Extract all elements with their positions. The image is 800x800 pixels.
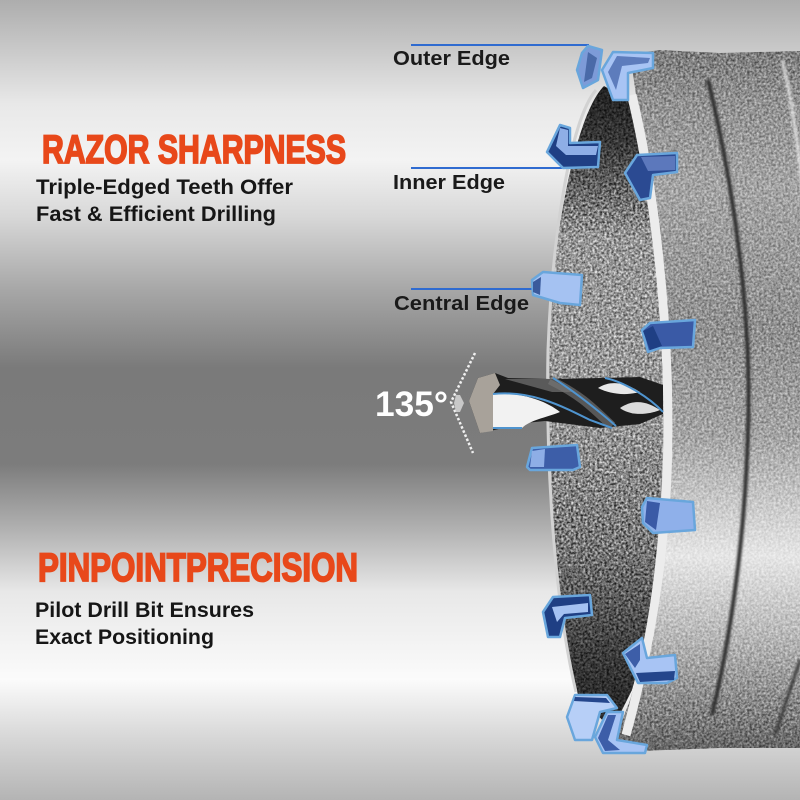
pilot drill bit [469, 373, 663, 433]
text: precision description: Pilot Drill Bit Ensures [35, 599, 254, 622]
angle marker [451, 353, 475, 453]
label: inner edge: Inner Edge [393, 172, 505, 194]
text: precision description: Exact Positioning [35, 626, 214, 649]
tooth 8 [642, 498, 695, 533]
tooth 4 [625, 153, 677, 200]
label: outer edge: Outer Edge [393, 48, 510, 70]
blue line: inner edge [411, 167, 567, 169]
text: razor description: Fast & Efficient Drilling [36, 203, 276, 226]
text: razor description [36, 176, 293, 226]
cylinder wall [618, 50, 800, 751]
heading: pinpoint precision: PINPOINTPRECISION [38, 546, 358, 590]
blue line: central edge [411, 288, 535, 290]
tooth 1 [577, 46, 602, 88]
tooth 3 [547, 125, 600, 168]
teeth [527, 46, 695, 753]
tooth 11 [567, 695, 617, 740]
tooth 12 [595, 712, 647, 753]
tooth 9 [543, 595, 592, 637]
tooth 10 [623, 638, 677, 683]
bright rim [626, 95, 668, 735]
label: central edge: Central Edge [394, 293, 529, 315]
inner face [549, 86, 663, 720]
tooth 6 [642, 320, 695, 352]
tooth 5 [532, 272, 582, 305]
text: razor description: Triple-Edged Teeth Offer [36, 176, 293, 199]
tooth 2 [602, 52, 653, 100]
text: precision description [35, 599, 254, 649]
heading: razor sharpness: RAZOR SHARPNESS [42, 128, 346, 172]
angle label: 135° [375, 385, 448, 424]
tooth 7 [527, 445, 580, 470]
blue line: outer edge [411, 44, 589, 46]
outer lip [548, 90, 596, 692]
hole saw body [540, 45, 800, 755]
